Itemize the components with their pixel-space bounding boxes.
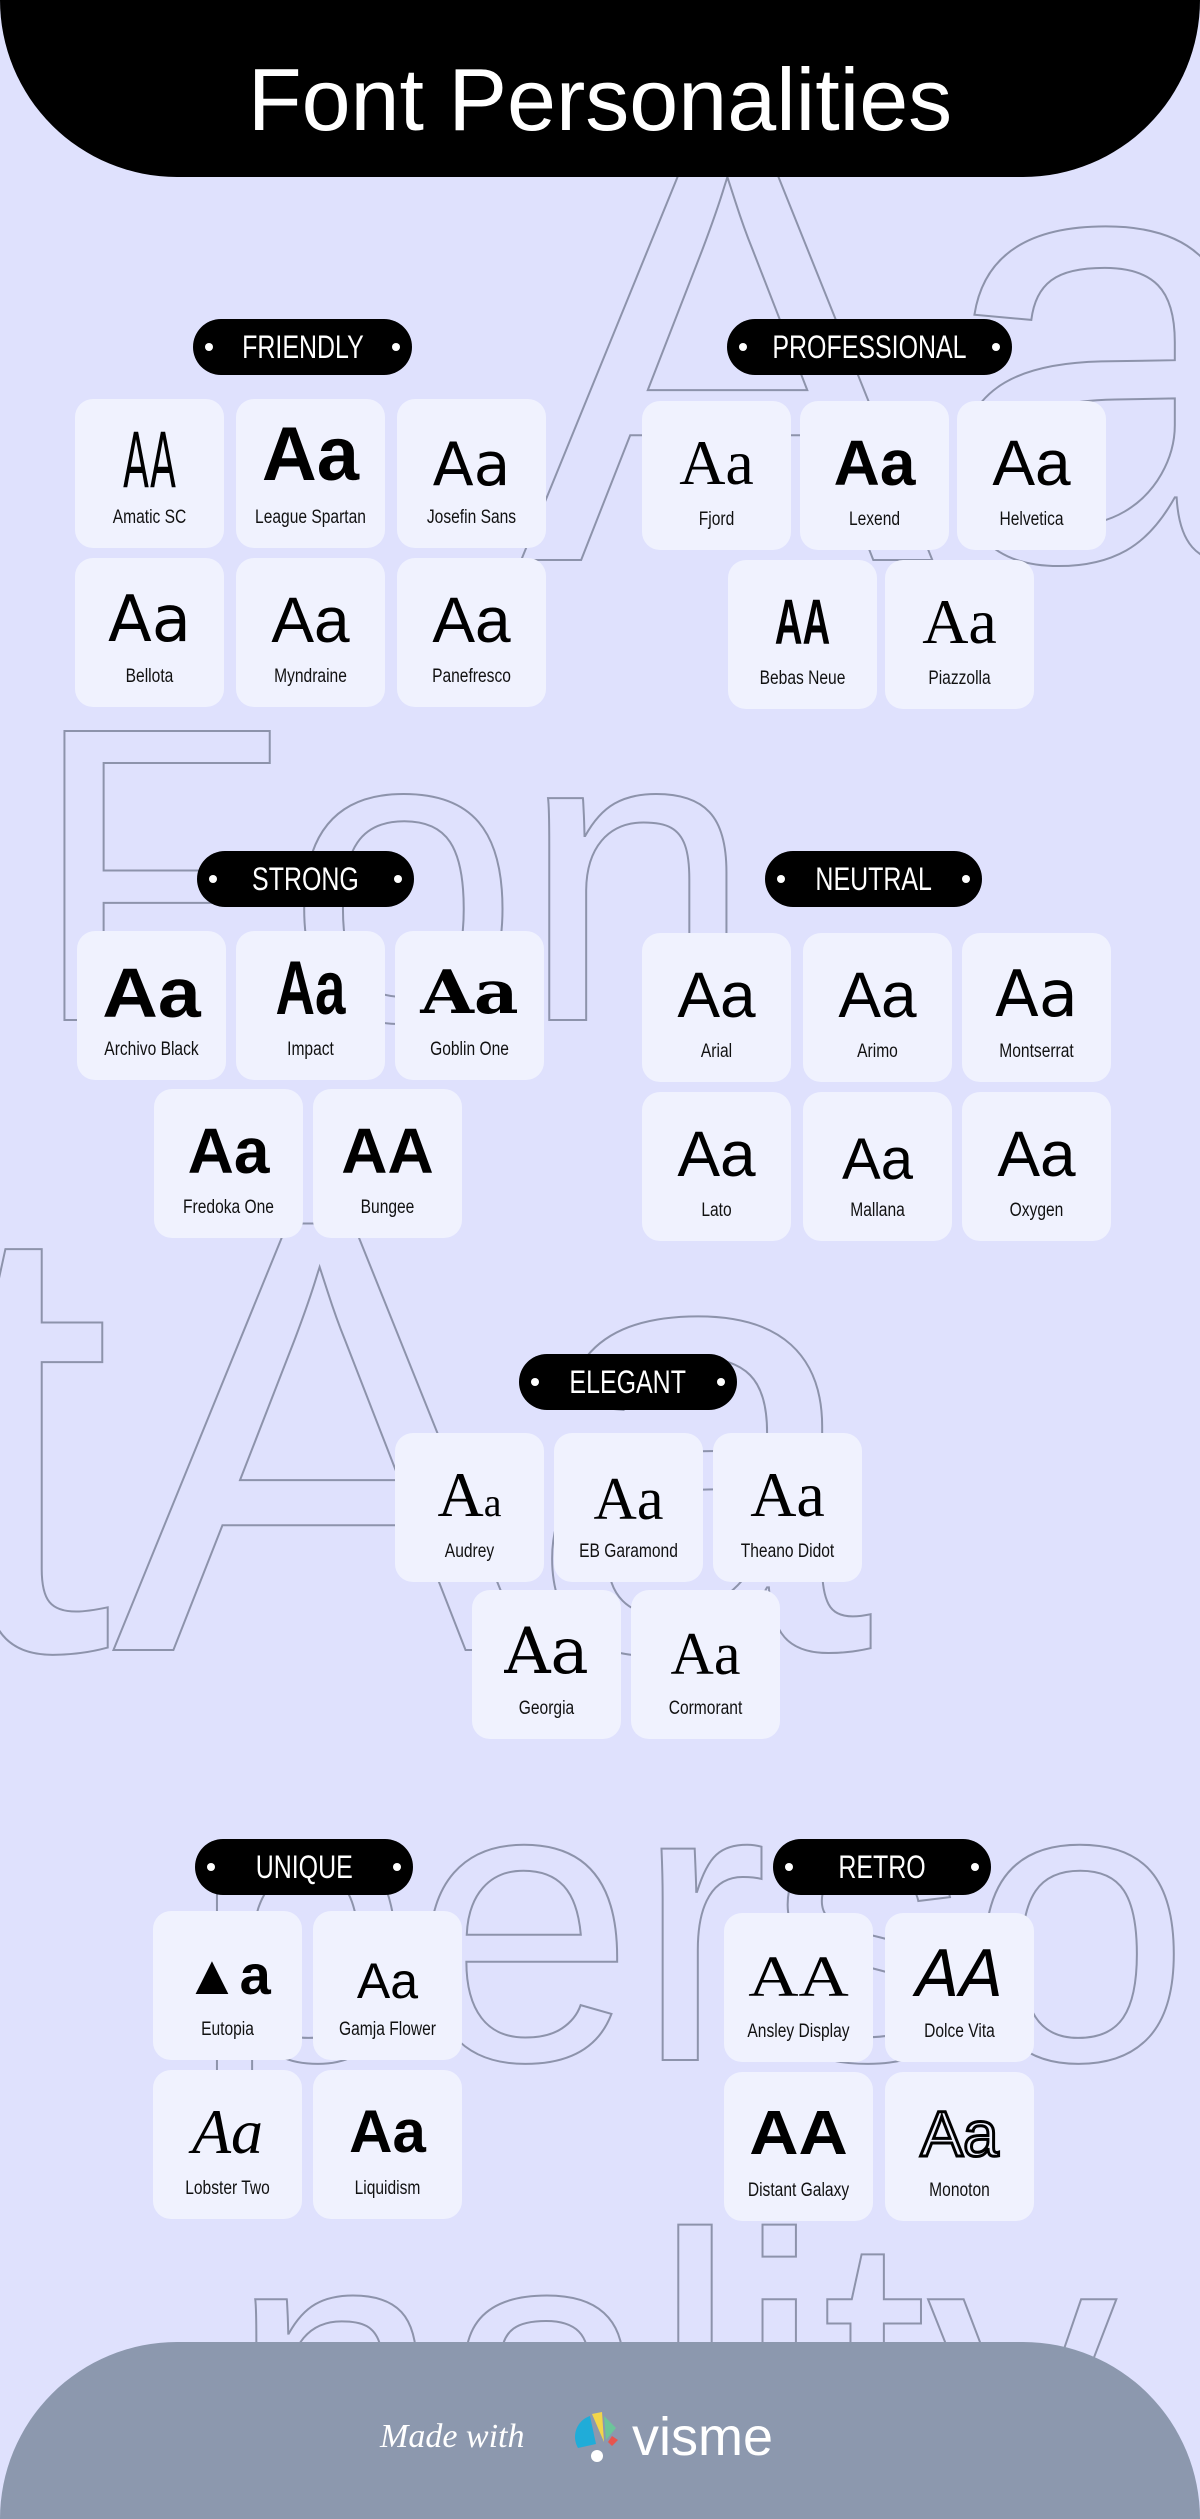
card: Arimo: Arimo: [857, 1041, 898, 1062]
pill: friendly: [193, 319, 412, 375]
card: Monoton: [885, 2072, 1034, 2221]
card: Helvetica: Aa: [992, 427, 1071, 499]
card: Bellota: [75, 558, 224, 707]
section: friendly: [75, 319, 546, 707]
pill: professional: [727, 319, 1012, 375]
card: Archivo Black: Archivo Black: [104, 1039, 199, 1060]
card: Liquidism: [313, 2070, 462, 2219]
card: Mallana: Aa: [842, 1127, 913, 1192]
card: Gamja Flower: [313, 1911, 462, 2060]
card: EB Garamond: EB Garamond: [579, 1541, 678, 1562]
card: Impact: [236, 931, 385, 1080]
card: Georgia: [472, 1590, 621, 1739]
card: Mallana: Mallana: [850, 1200, 905, 1221]
card: Bungee: [313, 1089, 462, 1238]
section: retro: [724, 1839, 1034, 2221]
pill: neutral: [765, 851, 982, 907]
card: Ansley Display: Ansley Display: [747, 2021, 850, 2042]
pill: elegant: ELEGANT: [570, 1364, 686, 1400]
card: Fjord: Fjord: [699, 509, 734, 530]
card: Audrey: Audrey: [445, 1541, 494, 1562]
card: Piazzolla: [885, 560, 1034, 709]
card: Helvetica: Helvetica: [999, 509, 1064, 530]
card: EB Garamond: Aa: [594, 1466, 663, 1532]
footer text: made with visme: visme: [632, 2407, 773, 2467]
card: Audrey: Aa: [438, 1459, 501, 1530]
card: Georgia: Aa: [504, 1615, 589, 1689]
card: Audrey: [395, 1433, 544, 1582]
card: Archivo Black: [77, 931, 226, 1080]
card: Lato: [642, 1092, 791, 1241]
card: League Spartan: [236, 399, 385, 548]
pill: retro: [773, 1839, 991, 1895]
card: Fjord: Aa: [679, 427, 754, 498]
pill: neutral: NEUTRAL: [815, 861, 932, 897]
card: Monoton: Monoton: [929, 2180, 990, 2201]
card: Lato: Aa: [677, 1118, 756, 1190]
card: Fredoka One: Aa: [188, 1115, 269, 1187]
card: Oxygen: Aa: [997, 1118, 1076, 1190]
card: Bellota: Aa: [108, 583, 191, 657]
pill: unique: UNIQUE: [255, 1849, 353, 1885]
pill: retro: RETRO: [838, 1849, 926, 1885]
card: Bebas Neue: Bebas Neue: [760, 668, 845, 689]
card: Ansley Display: [724, 1913, 873, 2062]
card: Distant Galaxy: AA: [749, 2099, 848, 2168]
card: Lexend: [800, 401, 949, 550]
card: Lato: Lato: [701, 1200, 732, 1221]
card: Josefin Sans: Josefin Sans: [427, 507, 516, 528]
card: Montserrat: Montserrat: [999, 1041, 1074, 1062]
card: Piazzolla: Piazzolla: [928, 668, 991, 689]
card: Bebas Neue: [728, 560, 877, 709]
card: Impact: Aa: [276, 946, 345, 1031]
card: Dolce Vita: Dolce Vita: [924, 2021, 995, 2042]
card: Mallana: [803, 1092, 952, 1241]
background outline letters: perso: [190, 1698, 1191, 2148]
card: Panefresco: [397, 558, 546, 707]
card: Arial: Aa: [677, 959, 756, 1031]
card: Amatic SC: AA: [123, 416, 176, 505]
card: Bungee: AA: [341, 1115, 434, 1187]
card: Myndraine: Aa: [271, 584, 350, 656]
card: Lobster Two: [153, 2070, 302, 2219]
card: Arial: [642, 933, 791, 1082]
card: Montserrat: Aa: [995, 958, 1078, 1032]
pill: professional: PROFESSIONAL: [772, 329, 967, 365]
card: Theano Didot: Aa: [750, 1459, 825, 1530]
background outline letters: Fon: [30, 641, 754, 1110]
card: Panefresco: Aa: [432, 584, 511, 656]
card: Lobster Two: Aa: [192, 2096, 263, 2167]
card: Goblin One: Aa: [420, 958, 519, 1028]
card: Impact: Impact: [287, 1039, 334, 1060]
footer: [0, 2342, 1200, 2519]
card: Theano Didot: [713, 1433, 862, 1582]
pill: friendly: FRIENDLY: [242, 329, 363, 365]
pill: elegant: [519, 1354, 737, 1410]
footer text: made with visme: [380, 2407, 773, 2467]
card: Dolce Vita: AA: [916, 1938, 1003, 2012]
card: Panefresco: Panefresco: [432, 666, 511, 687]
title bar: [0, 0, 1200, 177]
pill: strong: [197, 851, 414, 907]
card: Amatic SC: [75, 399, 224, 548]
card: Arimo: Aa: [838, 959, 917, 1031]
pill: strong: STRONG: [252, 861, 359, 897]
card: Gamja Flower: Gamja Flower: [339, 2019, 436, 2040]
card: League Spartan: Aa: [262, 412, 359, 497]
card: Josefin Sans: [397, 399, 546, 548]
card: Eutopia: Eutopia: [201, 2019, 254, 2040]
card: Eutopia: ▲a: [184, 1943, 271, 2006]
card: Liquidism: Aa: [349, 2098, 426, 2165]
card: Cormorant: Aa: [671, 1621, 740, 1687]
card: Josefin Sans: Aa: [433, 430, 510, 500]
pill: unique: [195, 1839, 413, 1895]
card: Lobster Two: Lobster Two: [185, 2178, 270, 2199]
card: Theano Didot: Theano Didot: [741, 1541, 834, 1562]
card: Fredoka One: [154, 1089, 303, 1238]
card: Helvetica: [957, 401, 1106, 550]
card: Bebas Neue: AA: [775, 586, 830, 658]
card: Bungee: Bungee: [361, 1197, 414, 1218]
section: neutral: [642, 851, 1111, 1241]
icon: visme logo: [575, 2412, 618, 2462]
card: Bellota: Bellota: [126, 666, 173, 687]
card: Cormorant: [631, 1590, 780, 1739]
card: Ansley Display: AA: [748, 1944, 849, 2009]
card: Cormorant: Cormorant: [669, 1698, 742, 1719]
card: Oxygen: [962, 1092, 1111, 1241]
card: Myndraine: [236, 558, 385, 707]
section: strong: [77, 851, 544, 1238]
card: EB Garamond: [554, 1433, 703, 1582]
card: Eutopia: [153, 1911, 302, 2060]
card: Arimo: [803, 933, 952, 1082]
card: Oxygen: Oxygen: [1010, 1200, 1063, 1221]
card: Lexend: Lexend: [849, 509, 900, 530]
card: Liquidism: Liquidism: [355, 2178, 420, 2199]
card: Goblin One: Goblin One: [430, 1039, 509, 1060]
card: Arial: Arial: [701, 1041, 732, 1062]
card: Myndraine: Myndraine: [274, 666, 347, 687]
card: League Spartan: League Spartan: [255, 507, 366, 528]
section: professional: [642, 319, 1106, 709]
card: Distant Galaxy: Distant Galaxy: [748, 2180, 849, 2201]
section: unique: [153, 1839, 462, 2219]
card: Piazzolla: Aa: [922, 586, 997, 657]
card: Amatic SC: Amatic SC: [113, 507, 186, 528]
card: Lexend: Aa: [834, 427, 915, 499]
card: Fjord: [642, 401, 791, 550]
section: elegant: [395, 1354, 862, 1739]
card: Dolce Vita: [885, 1913, 1034, 2062]
title bar: Font Personalities: [248, 50, 952, 149]
card: Distant Galaxy: [724, 2072, 873, 2221]
footer text: made with visme: Made with: [380, 2418, 524, 2455]
card: Gamja Flower: Aa: [357, 1953, 418, 2009]
card: Goblin One: [395, 931, 544, 1080]
card: Fredoka One: Fredoka One: [183, 1197, 274, 1218]
card: Georgia: Georgia: [519, 1698, 574, 1719]
card: Archivo Black: Aa: [102, 954, 201, 1032]
card: Montserrat: [962, 933, 1111, 1082]
